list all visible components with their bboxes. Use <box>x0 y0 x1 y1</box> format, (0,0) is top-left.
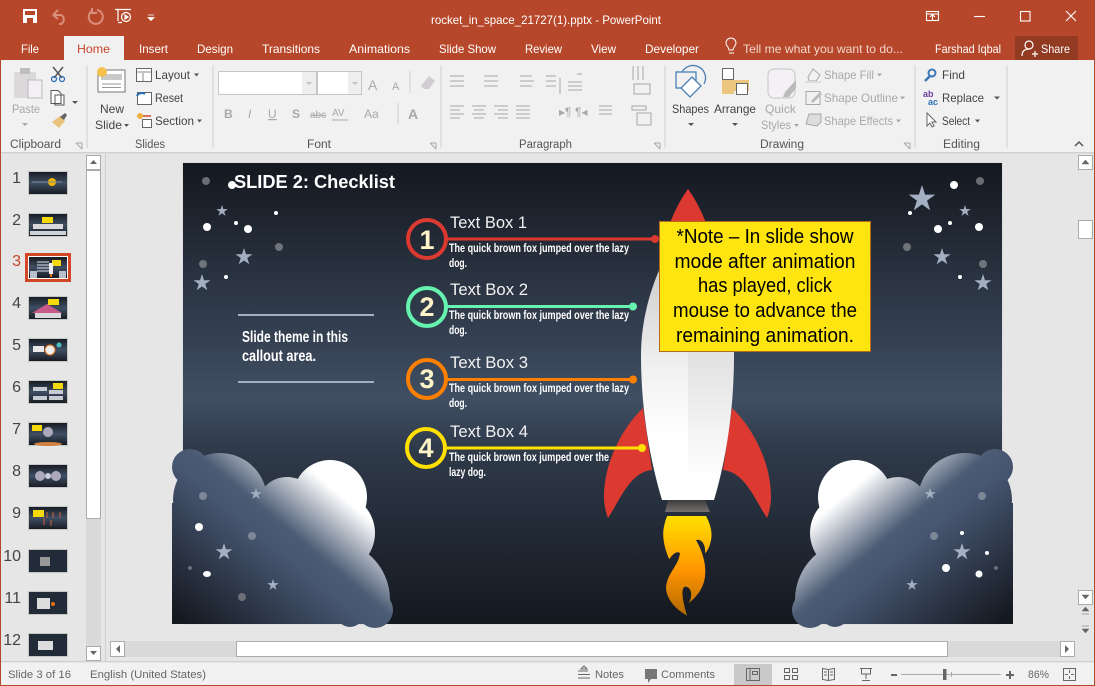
thumbnail 4: 4 <box>12 295 21 312</box>
ribbon tabs: Slide Show <box>439 42 496 56</box>
drawing group: Arrange <box>714 102 756 116</box>
thumbnail 12 <box>3 632 68 656</box>
status bar: English (United States) <box>90 669 206 681</box>
editing group <box>923 68 1000 151</box>
document title: rocket_in_space_21727(1).pptx - PowerPoint <box>431 13 662 27</box>
thumbnail 9: 9 <box>12 505 21 522</box>
checklist item 3 <box>408 353 637 410</box>
thumbnail 7 <box>12 421 68 446</box>
checklist item 4: The quick brown fox jumped over the <box>449 450 609 464</box>
ribbon tabs: Farshad Iqbal <box>935 42 1001 56</box>
note box: mode after animation <box>674 251 856 273</box>
ribbon tabs: Tell me what you want to do... <box>743 42 903 56</box>
editing group: Select <box>942 114 971 128</box>
font group: Aa <box>364 107 379 121</box>
notes button: Notes <box>595 669 624 681</box>
vertical scrollbar <box>1078 155 1093 633</box>
font group: A <box>408 106 418 122</box>
zoom slider: 86% <box>1028 669 1049 681</box>
drawing group: Shape Fill <box>824 68 874 82</box>
font group: B <box>224 107 233 121</box>
font group: S <box>292 107 300 121</box>
font group: U <box>268 107 277 121</box>
checklist item 1: 1 <box>419 225 435 255</box>
rocket body <box>641 228 734 500</box>
icon: arrange <box>722 68 749 94</box>
view buttons <box>734 664 872 686</box>
clipboard group <box>10 67 82 151</box>
note box <box>660 222 870 352</box>
checklist item 4: 4 <box>418 433 434 463</box>
clipboard group: Clipboard <box>10 139 61 151</box>
editing group: Editing <box>943 139 980 151</box>
font group: A <box>392 81 400 93</box>
checklist item 2: 2 <box>419 292 435 322</box>
zoom slider <box>891 668 1076 681</box>
checklist item 2: dog. <box>449 323 467 337</box>
font group: abc <box>310 110 326 121</box>
thumbnail 4 <box>12 295 68 320</box>
ribbon tabs: Review <box>525 42 562 56</box>
checklist item 3: 3 <box>419 364 435 394</box>
drawing group: Quick <box>765 102 797 116</box>
icon: save <box>23 9 37 23</box>
icon: undo <box>53 10 64 24</box>
ribbon <box>0 60 1095 154</box>
slides group: Reset <box>155 91 184 105</box>
note box: mouse to advance the <box>673 300 857 322</box>
thumbnail 8 <box>12 463 68 488</box>
ribbon tabs: Developer <box>645 42 699 56</box>
thumbnail 2: 2 <box>12 212 21 229</box>
slides group: New <box>100 102 124 116</box>
rocket nozzle <box>665 500 710 512</box>
editing group: Find <box>942 68 965 82</box>
slides group: Slide <box>95 118 122 132</box>
checklist item 2: Text Box 2 <box>450 280 528 299</box>
icon: lightbulb <box>726 38 736 53</box>
thumbnail 6 <box>12 379 68 404</box>
slide thumbnails pane <box>3 154 106 662</box>
slides group: Slides <box>135 139 165 151</box>
checklist item 3: dog. <box>449 396 467 410</box>
ribbon tabs <box>21 36 1078 60</box>
callout area: callout area. <box>242 348 316 365</box>
checklist item 4 <box>407 422 646 479</box>
icon: redo <box>89 8 103 24</box>
status bar: Slide 3 of 16 <box>8 669 71 681</box>
share button: Share <box>1041 42 1070 56</box>
thumbnail 9 <box>12 505 68 530</box>
editing group: Replace <box>942 91 984 105</box>
icon: quick styles <box>768 69 796 98</box>
font group: Font <box>307 139 332 151</box>
paragraph group: ¶◂ <box>575 105 587 119</box>
notes button <box>578 666 624 681</box>
right stars and dots <box>903 177 992 290</box>
editing group: ab <box>923 89 934 99</box>
ribbon tabs: View <box>591 42 616 56</box>
window controls <box>926 11 1076 21</box>
thumbnail 2 <box>12 212 68 236</box>
icon: shapes <box>676 65 706 97</box>
thumbnail 5 <box>12 337 68 362</box>
left stars and dots <box>193 177 283 290</box>
rocket flame <box>663 516 712 616</box>
drawing group: Shape Outline <box>824 91 898 105</box>
drawing group: Shape Effects <box>824 114 893 128</box>
thumbnail 3 selected <box>12 253 70 280</box>
checklist item 1 <box>408 213 659 270</box>
thumbnail 7: 7 <box>12 421 21 438</box>
slide canvas <box>172 162 1013 660</box>
ribbon tabs: Animations <box>349 42 410 56</box>
checklist item 4: lazy dog. <box>449 465 486 479</box>
drawing group: Styles <box>761 118 791 132</box>
thumbnail 1 <box>12 170 68 194</box>
icon: collapse ribbon <box>1075 142 1083 146</box>
note box: remaining animation. <box>676 325 854 347</box>
slides group <box>95 67 202 151</box>
checklist item 3: The quick brown fox jumped over the lazy <box>449 381 629 395</box>
font group: I <box>248 107 252 121</box>
thumbnail 5: 5 <box>12 337 21 354</box>
rocket nose <box>664 189 712 240</box>
slides group: Section <box>155 114 194 128</box>
checklist item 1: The quick brown fox jumped over the lazy <box>449 241 629 255</box>
slides group: Layout <box>155 68 191 82</box>
note box: *Note – In slide show <box>676 226 854 248</box>
icon: customize menu <box>148 15 154 20</box>
thumbnail 10 <box>3 548 68 572</box>
callout area <box>238 315 374 382</box>
paragraph group <box>450 66 660 151</box>
checklist item 3: Text Box 3 <box>450 353 528 372</box>
thumbnail 6: 6 <box>12 379 21 396</box>
clipboard group: Paste <box>12 102 40 116</box>
slide title: SLIDE 2: Checklist <box>234 172 395 192</box>
paragraph group: ▸¶ <box>559 105 571 119</box>
group dividers <box>87 65 1007 148</box>
thumbnail 12: 12 <box>3 632 21 649</box>
rocket fins <box>604 408 771 518</box>
note box: has played, click <box>698 275 833 297</box>
drawing group: Drawing <box>760 139 804 151</box>
checklist item 2 <box>408 280 637 337</box>
ribbon tabs: Home <box>77 42 110 56</box>
ribbon tabs: Insert <box>139 42 169 56</box>
drawing group <box>672 65 910 151</box>
status bar <box>0 662 1095 686</box>
horizontal scrollbar <box>110 641 1075 657</box>
font group: A <box>368 77 378 93</box>
ribbon tabs: Design <box>197 42 233 56</box>
paragraph group: Paragraph <box>519 139 572 151</box>
checklist item 2: The quick brown fox jumped over the lazy <box>449 308 629 322</box>
comments button: Comments <box>661 669 715 681</box>
thumbnail 10: 10 <box>3 548 21 565</box>
callout area: Slide theme in this <box>242 329 348 346</box>
icon: slideshow <box>115 10 131 22</box>
rocket <box>604 189 771 616</box>
thumbnails scrollbar <box>86 155 101 661</box>
ribbon tabs: Transitions <box>262 42 320 56</box>
font group: AV <box>332 108 345 119</box>
font group <box>218 71 436 151</box>
thumbnail 11 <box>4 590 68 614</box>
share button <box>1015 36 1078 60</box>
ribbon tabs: File <box>21 42 39 56</box>
drawing group: Shapes <box>672 102 709 116</box>
thumbnail 3 selected: 3 <box>12 253 21 270</box>
editing group: ac <box>928 97 938 107</box>
checklist item 4: Text Box 4 <box>450 422 528 441</box>
title bar <box>0 0 1095 60</box>
right cloud <box>792 449 1013 628</box>
thumbnail 1: 1 <box>12 170 21 187</box>
left cloud <box>172 449 393 628</box>
comments button <box>645 669 715 683</box>
thumbnail 8: 8 <box>12 463 21 480</box>
checklist item 1: Text Box 1 <box>450 213 527 232</box>
slide background <box>183 163 1002 624</box>
checklist item 1: dog. <box>449 256 467 270</box>
thumbnail 11: 11 <box>4 590 21 607</box>
